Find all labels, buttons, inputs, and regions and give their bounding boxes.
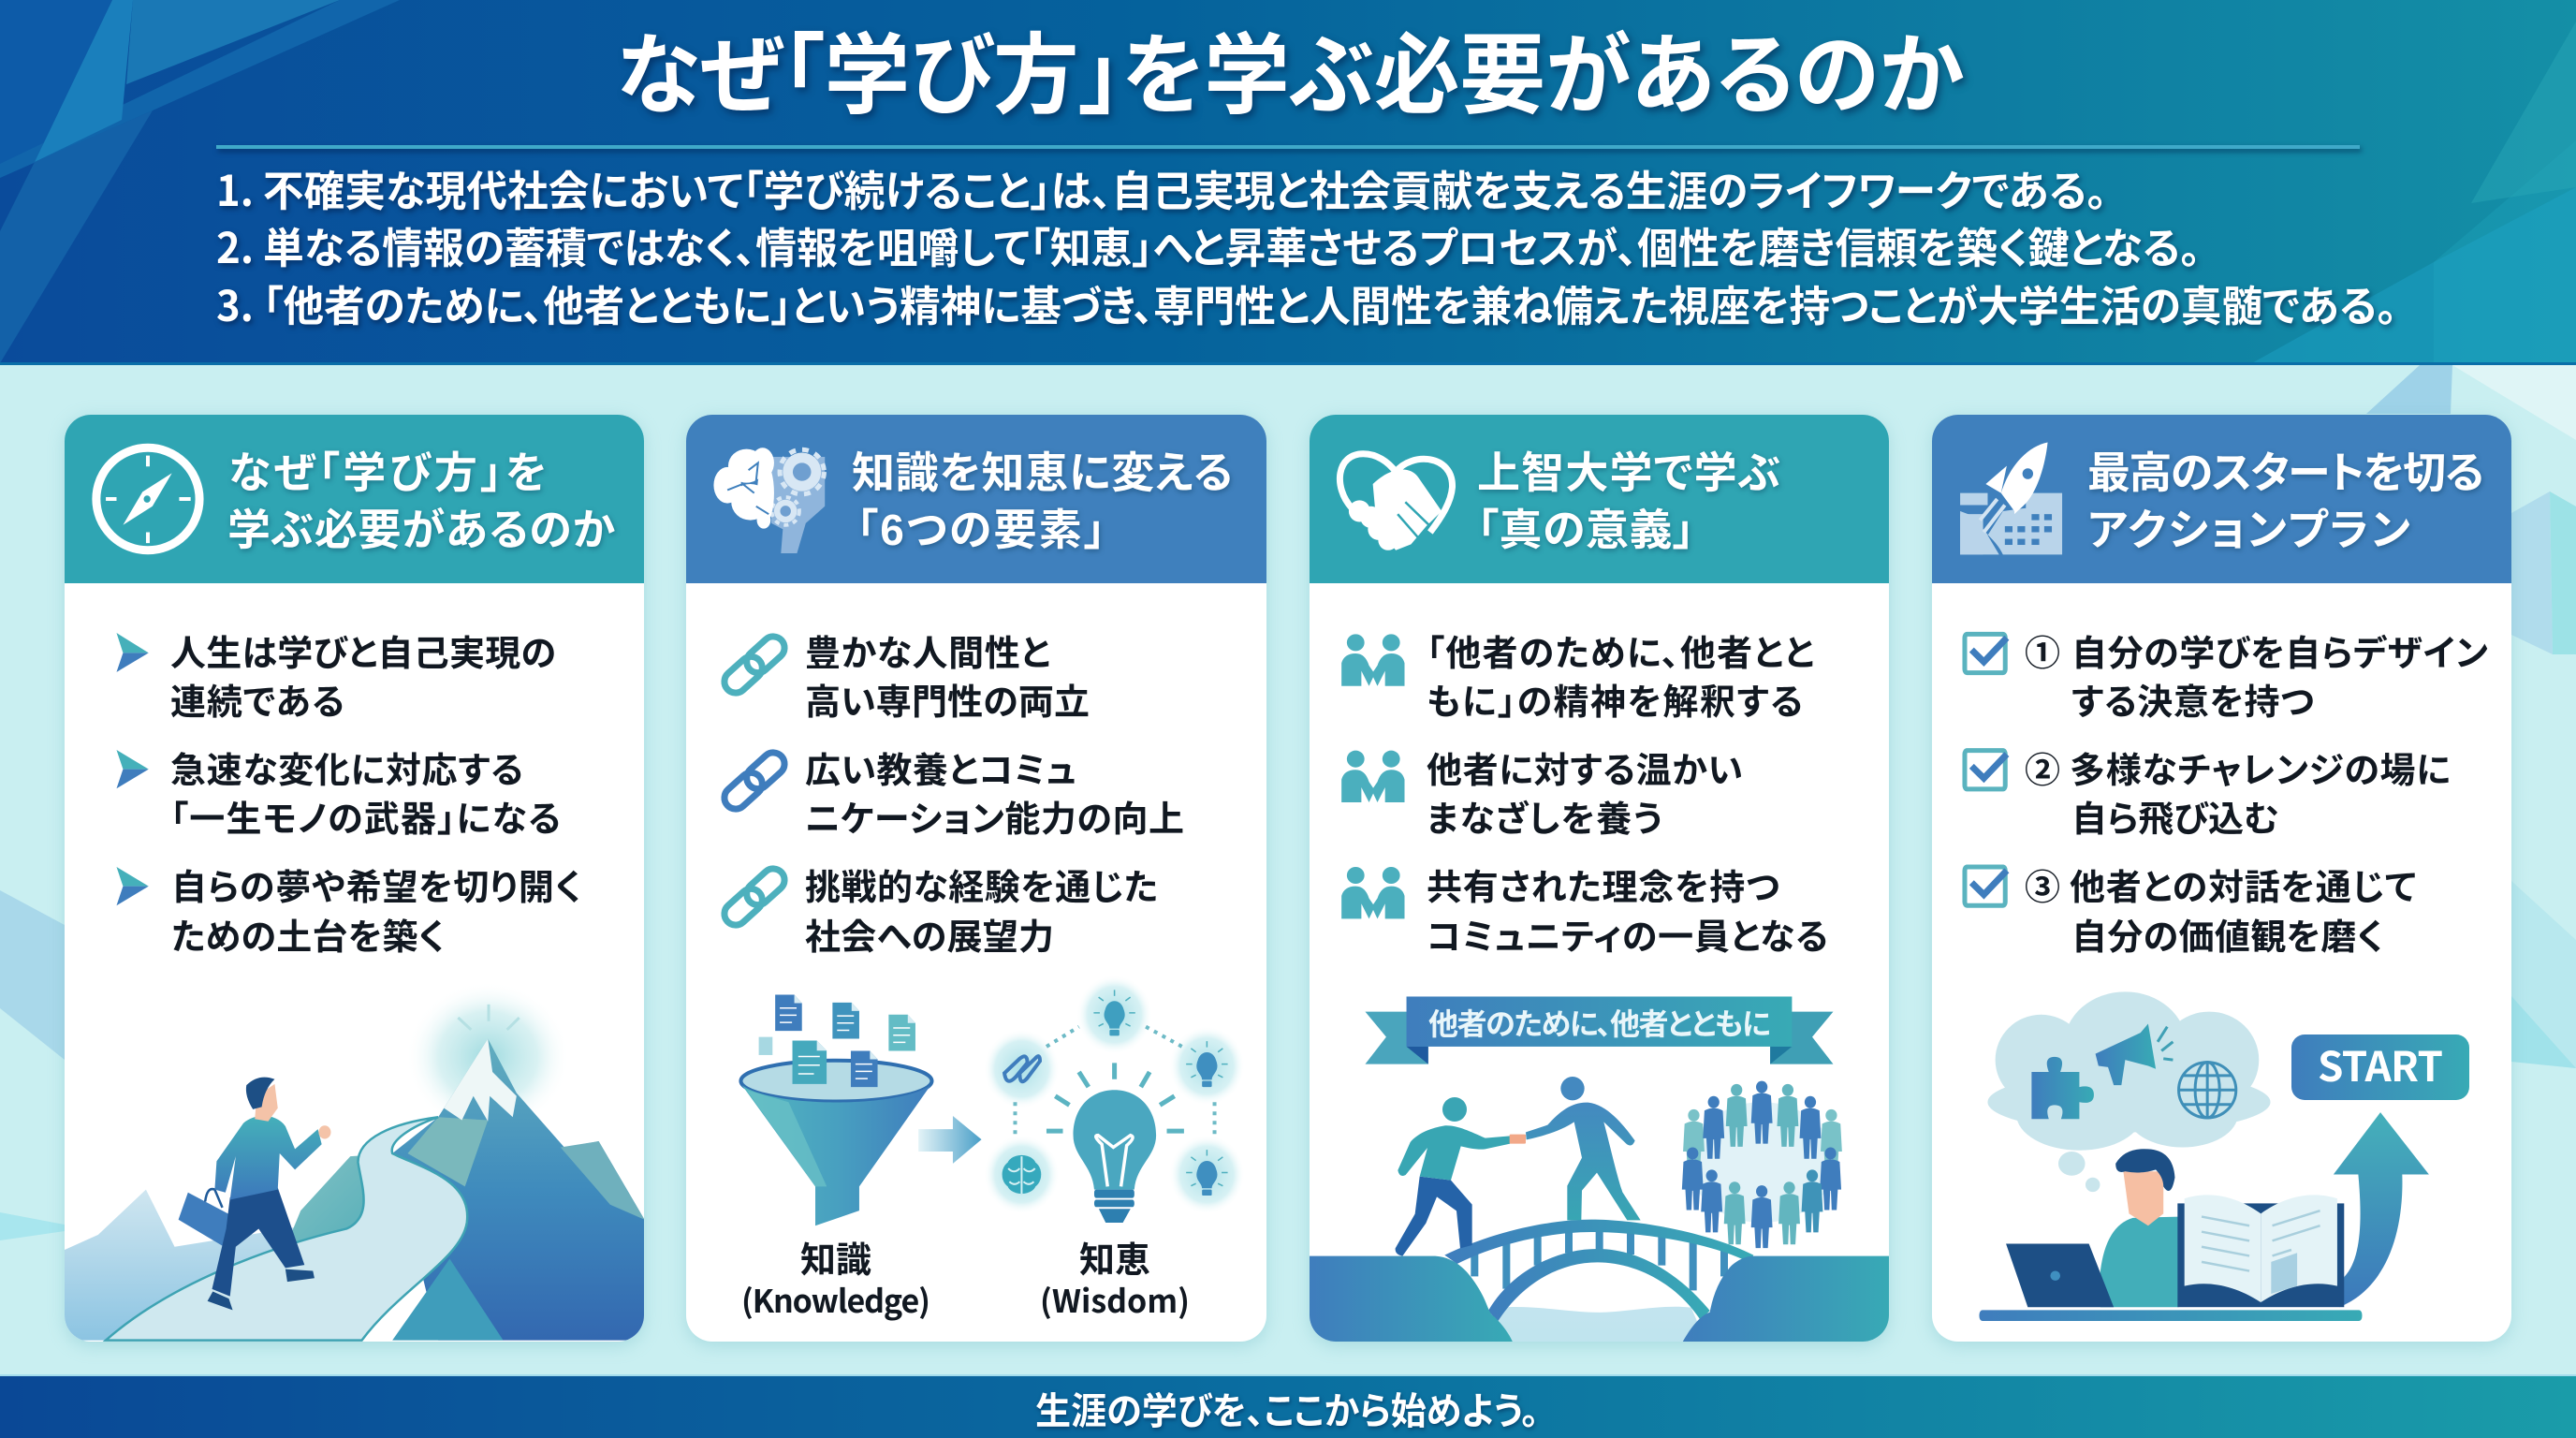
list: する決意を持つ [2071,673,2314,725]
illustration: helping across a bridge [1309,1077,1891,1343]
list [720,624,1184,960]
summary points: 2. 単なる情報の蓄積ではなく、情報を咀嚼して「知恵」へと昇華させるプロセスが、個性を磨き信頼を築く鍵となる。 [216,214,2201,275]
heading: 知識を知恵に変える [852,448,1233,497]
panel: why learn how to learn [65,415,645,1342]
bullet list [116,624,581,960]
header band [0,0,2576,365]
illustration: START button: START [2318,1034,2443,1093]
funnel [740,995,932,1225]
list: 「他者のために、他者とと [1427,624,1814,676]
illustration: banner: 他者のために、他者とともに [1428,1001,1771,1044]
caption: knowledge [741,1231,930,1322]
list: 社会への展望力 [805,908,1054,960]
list: 豊かな人間性と [805,624,1050,676]
heading: 「真の意義」 [1477,506,1694,554]
illustration: climbing the mountain [65,981,645,1341]
list: ② [2025,741,2060,793]
caption: wisdom: (Wisdom) [1040,1276,1190,1322]
arrow [918,1116,982,1164]
list: まなざしを養う [1427,790,1662,842]
bullet list: 「一生モノの武器」になる [170,790,561,842]
summary points [216,145,2397,333]
summary points: 1. 不確実な現代社会において「学び続けること」は、自己実現と社会貢献を支える生涯のライフワークである。 [216,157,2107,218]
list [1341,624,1828,960]
illustration: student with book and arrow [1979,1112,2429,1321]
heading: なぜ「学び方」を [228,448,547,497]
caption: wisdom: 知恵 [1079,1231,1150,1283]
list: 挑戦的な経験を通じた [805,858,1158,910]
glows and small icons [984,975,1245,1214]
illustration: START button [2291,1034,2469,1100]
bullet list: 連続である [170,673,344,725]
panel: action plan [1932,415,2511,1342]
panel: six elements [686,415,1266,1342]
list: ③ [2025,858,2060,910]
summary points: 3. 「他者のために、他者とともに」という精神に基づき、専門性と人間性を兼ね備えた視座を持つことが大学生活の真髄である。 [216,272,2397,333]
list: コミュニティの一員となる [1427,908,1828,960]
list: 他者に対する温かい [1427,741,1743,793]
list: ニケーション能力の向上 [805,790,1184,842]
icons: arrow bullets [116,633,149,905]
illustration: banner [1365,996,1833,1064]
icons: check boxes [1965,634,2007,905]
bullet list: 自らの夢や希望を切り開く [171,858,581,910]
caption: knowledge: (Knowledge) [741,1276,930,1322]
heading [852,448,1233,554]
heading: 学ぶ必要があるのか [227,506,615,554]
bullet list: 急速な変化に対応する [170,741,523,793]
list: 高い専門性の両立 [805,673,1090,725]
heading [2087,448,2484,554]
illustration: circle of people [1682,1081,1842,1248]
list: もに」の精神を解釈する [1427,673,1803,725]
icons: people pairs [1341,634,1405,918]
footer band [0,1374,2576,1438]
list: 多様なチャレンジの場に [2070,741,2451,793]
list [1965,624,2488,960]
list: 広い教養とコミュ [805,741,1076,793]
heading: 「6つの要素」 [856,506,1105,554]
heading [227,448,615,554]
list: 自分の学びを自らデザイン [2071,624,2488,676]
bullet list: ための土台を築く [171,908,445,960]
icons: chain links [720,632,789,930]
icon: brain and gears [713,448,825,553]
title: なぜ「学び方」を学ぶ必要があるのか [616,5,1964,132]
icon: compass [96,448,199,550]
light bulb [1046,1063,1184,1223]
list: 自分の価値観を磨く [2071,908,2383,960]
bullet list: 人生は学びと自己実現の [170,624,556,676]
heading: 上智大学で学ぶ [1477,448,1780,497]
heading: 最高のスタートを切る [2087,448,2484,497]
caption: knowledge: 知識 [800,1231,871,1283]
heading [1477,448,1780,554]
illustration: funnel to light bulb [740,975,1245,1225]
list: ① [2025,624,2060,676]
icon: rocket and calendar [1960,443,2062,554]
list: 共有された理念を持つ [1427,858,1779,910]
card shadows [65,418,2511,1346]
caption: wisdom [1040,1231,1190,1322]
list: 他者との対話を通じて [2070,858,2416,910]
heading: アクションプラン [2087,506,2410,554]
icon: handshake heart [1339,454,1453,550]
footer message: 生涯の学びを、ここから始めよう。 [1035,1381,1539,1435]
panel: meaning at Sophia [1309,415,1891,1343]
illustration: thought cloud [1987,991,2271,1192]
list: 自ら飛び込む [2071,790,2279,842]
